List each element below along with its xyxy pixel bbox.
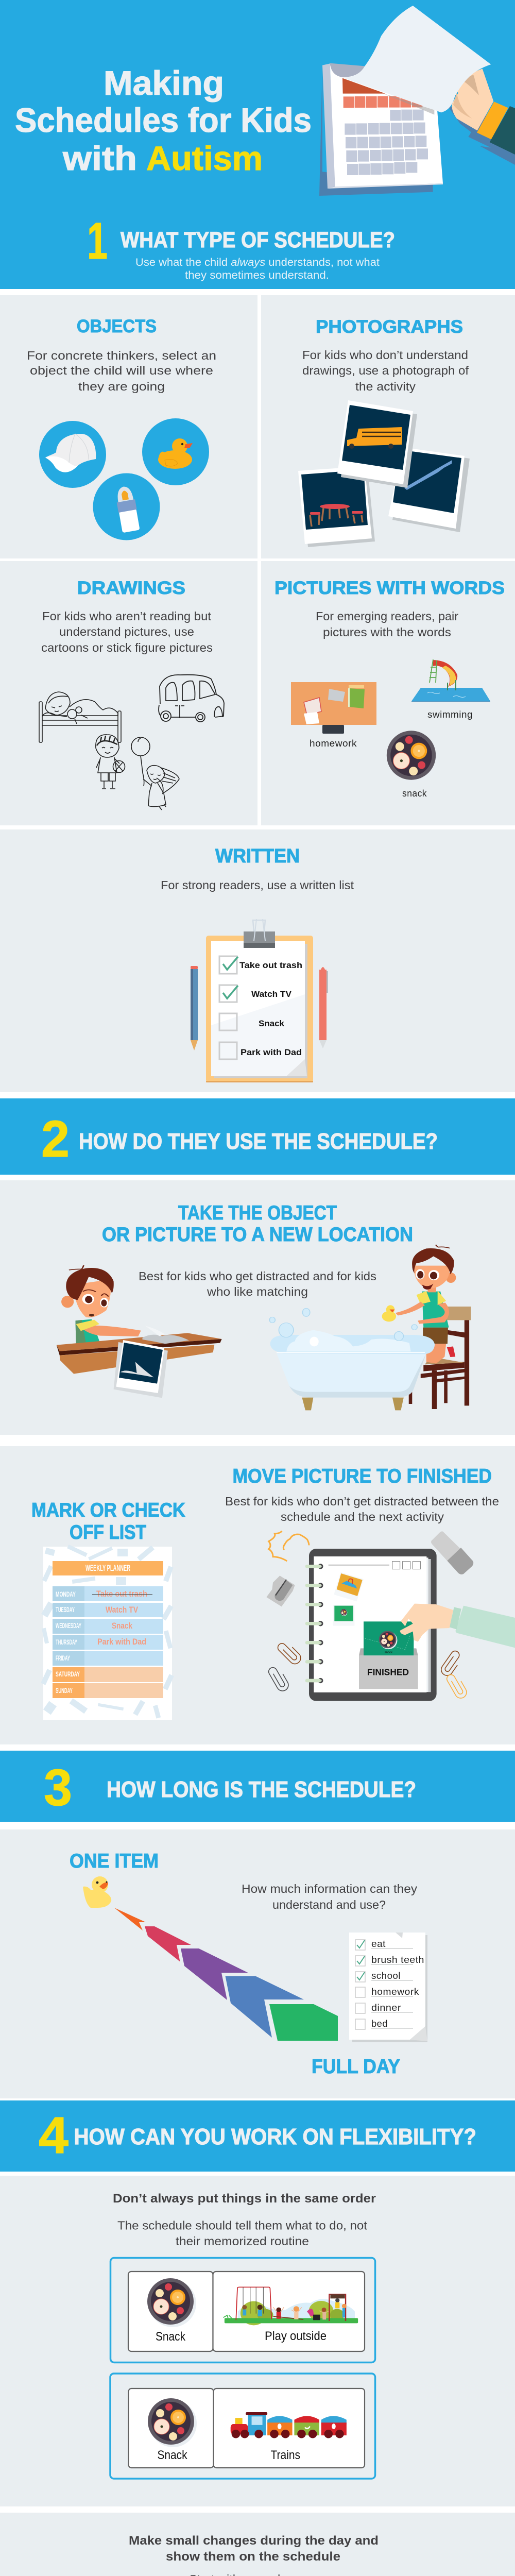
description: written: For strong readers, use a written list — [161, 878, 354, 892]
panel: small changes — [0, 2513, 515, 2576]
sharpener — [266, 1575, 295, 1606]
heading: objects: OBJECTS — [77, 316, 157, 336]
checkbox: take out trash: Take out trash — [239, 960, 302, 970]
panel: photographs — [261, 295, 515, 558]
description: pictures with words — [316, 609, 458, 639]
schedule example: snack then play outside — [110, 2258, 375, 2363]
panel: order of activities — [0, 2176, 515, 2506]
description: objects — [27, 349, 216, 393]
subheading: they sometimes understand. — [185, 269, 329, 281]
description: photographs: For kids who don’t understand — [302, 348, 468, 362]
heading: take the object — [102, 1202, 413, 1246]
card: play outside: Play outside — [265, 2329, 327, 2343]
full day checklist note — [349, 1933, 427, 2042]
description: drawings — [41, 609, 213, 654]
list item: eat: eat — [371, 1939, 386, 1949]
label: swimming: swimming — [427, 709, 473, 720]
planner row: friday — [53, 1651, 163, 1666]
heading: small changes: Make small changes during the day and — [129, 2534, 379, 2548]
description: move picture — [225, 1495, 499, 1523]
label: one item: ONE ITEM — [70, 1850, 159, 1872]
heading: small changes — [129, 2534, 379, 2564]
panel: objects — [0, 295, 258, 558]
label: full day: FULL DAY — [312, 2056, 400, 2078]
planner row: wednesday: WEDNESDAY — [56, 1621, 81, 1630]
illustration: boy at desk — [57, 1265, 222, 1398]
panel: mark off and move picture — [0, 1446, 515, 1744]
panel: drawings — [0, 561, 258, 825]
title: with — [62, 139, 137, 177]
description: objects: object the child will use where — [30, 364, 213, 377]
description: objects: they are going — [78, 380, 165, 393]
eraser — [431, 1531, 473, 1574]
finished pocket — [359, 1648, 418, 1689]
subheading: Use what the child always understands, not what — [135, 257, 380, 268]
hand placing card — [400, 1604, 515, 1648]
planner row: tuesday — [53, 1603, 163, 1617]
illustration: toy train — [231, 2412, 347, 2438]
description: pictures with words: For emerging readers, pair — [316, 609, 458, 623]
heading: photographs: PHOTOGRAPHS — [316, 317, 463, 337]
planner row: wednesday — [53, 1619, 163, 1634]
section header 3 — [0, 1751, 515, 1822]
boy standing at bathtub — [395, 1245, 456, 1364]
planner row: sunday: SUNDAY — [56, 1686, 73, 1694]
pencil shavings — [269, 1531, 309, 1561]
icon: yellow duck — [83, 1876, 111, 1908]
checkbox: watch TV — [219, 985, 292, 1002]
soap bubbles — [269, 1308, 417, 1341]
checkbox: snack: Snack — [259, 1019, 285, 1028]
label: snack: snack — [402, 788, 427, 799]
planner row: saturday — [53, 1667, 163, 1682]
list item: eat — [355, 1939, 413, 1950]
card: trains: Trains — [271, 2448, 300, 2462]
drawing: bus car — [159, 675, 224, 722]
drawing: child sleeping in bed — [39, 692, 121, 742]
clipboard checklist — [206, 919, 313, 1082]
description: pictures with words: pictures with the words — [323, 625, 451, 639]
icon: pen — [319, 967, 328, 1048]
heading: mark or check off list — [31, 1499, 185, 1544]
notebook rings — [307, 1565, 322, 1683]
description: drawings: For kids who aren’t reading but — [42, 609, 212, 623]
heading: how do they use: HOW DO THEY USE THE SCHEDULE? — [79, 1129, 438, 1154]
panel: written — [0, 829, 515, 1092]
description: how much information: understand and use? — [272, 1898, 386, 1911]
planner title — [53, 1561, 163, 1575]
number 1: 1 — [87, 212, 108, 270]
illustration: notebook with finished pocket — [266, 1531, 515, 1701]
icon: baby bottle — [93, 473, 160, 540]
title — [15, 64, 312, 177]
planner row: thursday: THURSDAY — [56, 1638, 77, 1646]
card: snack — [128, 2272, 213, 2351]
checkbox: snack — [219, 1013, 285, 1030]
list item: bed: bed — [371, 2019, 388, 2029]
icon: pencil — [191, 966, 198, 1050]
list item: homework: homework — [371, 1987, 420, 1997]
card: swimming done — [334, 1572, 364, 1601]
planner row: thursday — [53, 1635, 163, 1650]
list item: bed — [355, 2019, 413, 2029]
green snack card: snack — [385, 1651, 392, 1654]
icon: calendar with hand turning page — [319, 6, 515, 196]
paperclips — [267, 1639, 469, 1700]
description: take the object: Best for kids who get distracted and for kids — [139, 1269, 376, 1283]
planner row: sunday — [53, 1683, 163, 1698]
panel: pictures with words — [261, 561, 515, 825]
heading: small changes: show them on the schedule — [166, 2550, 340, 2564]
description: memorized routine: their memorized routine — [176, 2234, 309, 2248]
number 2: 2 — [41, 1110, 70, 1168]
planner row: tuesday: TUESDAY — [56, 1605, 75, 1614]
card: trains — [213, 2388, 365, 2468]
illustration: playground — [223, 2287, 358, 2325]
subheading — [135, 257, 380, 281]
description: memorized routine: The schedule should tell them what to do, not — [117, 2218, 368, 2232]
list item: brush teeth — [355, 1955, 424, 1966]
description: take the object — [139, 1269, 376, 1298]
planner title: WEEKLY PLANNER — [85, 1563, 130, 1573]
checkbox: park with dad: Park with Dad — [241, 1047, 302, 1057]
description: photographs: drawings, use a photograph of — [302, 364, 469, 377]
title: Making — [104, 64, 224, 102]
picture: snack bowl — [387, 731, 439, 783]
description: objects: For concrete thinkers, select an — [27, 349, 216, 362]
heading: move picture to finished: MOVE PICTURE TO FINISHED — [233, 1465, 492, 1487]
number 4: 4 — [39, 2107, 68, 2164]
weekly planner — [41, 1545, 174, 1720]
title: Schedules for Kids — [15, 101, 312, 139]
number 3: 3 — [44, 1759, 72, 1817]
planner row: tuesday: Watch TV — [106, 1605, 139, 1615]
chair — [409, 1307, 471, 1409]
photo: toothbrush — [388, 447, 470, 532]
heading: mark or check off list: MARK OR CHECK — [31, 1499, 185, 1521]
planner row: monday: MONDAY — [56, 1590, 76, 1598]
card: snack — [129, 2388, 213, 2468]
planner row: thursday: Park with Dad — [97, 1637, 146, 1647]
description: move picture: schedule and the next activity — [281, 1510, 444, 1523]
finished pocket: FINISHED — [367, 1667, 409, 1677]
green snack card — [364, 1621, 414, 1655]
panel: hero header — [0, 0, 515, 289]
planner row: monday — [53, 1586, 163, 1601]
photo: school bus — [337, 400, 417, 488]
panel: take object to new location — [0, 1180, 515, 1435]
planner row: friday: FRIDAY — [56, 1654, 70, 1662]
heading: take the object: TAKE THE OBJECT — [178, 1202, 337, 1224]
card: play outside — [213, 2272, 365, 2351]
list item: dinner: dinner — [371, 2003, 401, 2013]
schedule example: snack then trains — [110, 2374, 375, 2479]
description: memorized routine — [117, 2218, 368, 2248]
drawing: girl with balloon — [131, 737, 179, 810]
illustration: bathtub with bubbles — [269, 1245, 471, 1410]
description: drawings: cartoons or stick figure pictures — [41, 641, 213, 654]
description: photographs — [302, 348, 469, 393]
heading: drawings: DRAWINGS — [77, 578, 185, 598]
list item: homework — [355, 1987, 420, 1997]
description: photographs: the activity — [355, 380, 416, 393]
arrow: growing schedule length — [114, 1908, 338, 2041]
heading: how long: HOW LONG IS THE SCHEDULE? — [107, 1777, 416, 1802]
checkbox: park with dad — [219, 1042, 302, 1059]
card: snack: Snack — [156, 2330, 186, 2344]
list item: dinner — [355, 2003, 413, 2013]
picture: swimming pool — [411, 659, 490, 702]
description: drawings: understand pictures, use — [59, 625, 194, 638]
heading: what type of schedule: WHAT TYPE OF SCHEDULE? — [121, 228, 395, 252]
checkbox: take out trash — [219, 956, 302, 974]
checkbox: watch TV: Watch TV — [251, 989, 292, 999]
section header 2 — [0, 1098, 515, 1175]
description: take the object: who like matching — [207, 1285, 308, 1298]
list item: school — [355, 1971, 413, 1982]
heading: mark or check off list: OFF LIST — [70, 1521, 146, 1544]
card: snack: Snack — [158, 2448, 187, 2462]
photo: table and stools — [298, 466, 375, 547]
icon: rubber duck in hand — [382, 1305, 396, 1321]
heading: take the object: OR PICTURE TO A NEW LOCATION — [102, 1224, 413, 1246]
card: green done — [333, 1605, 354, 1626]
description: how much information — [242, 1882, 418, 1911]
picture: homework desk — [291, 682, 376, 734]
heading: written: WRITTEN — [215, 845, 300, 867]
heading: pictures with words: PICTURES WITH WORDS — [274, 578, 505, 598]
icon: rubber duck — [142, 418, 209, 485]
heading: flexibility: HOW CAN YOU WORK ON FLEXIBILITY? — [74, 2124, 476, 2149]
heading: same order: Don’t always put things in the same order — [113, 2192, 376, 2206]
binder clip — [244, 919, 275, 948]
description: move picture: Best for kids who don’t get distracted between the — [225, 1495, 499, 1508]
section header 4 — [0, 2100, 515, 2172]
drawing: boy with ball — [96, 735, 125, 789]
planner row: monday: Take out trash — [96, 1589, 147, 1599]
panel: how long is the schedule — [0, 1829, 515, 2098]
list item: school: school — [371, 1971, 401, 1981]
title: Autism — [146, 139, 263, 177]
planner row: saturday: SATURDAY — [56, 1670, 80, 1678]
list item: brush teeth: brush teeth — [371, 1955, 424, 1965]
icon: baseball cap — [39, 421, 106, 488]
label: homework: homework — [310, 738, 357, 749]
description: how much information: How much information can they — [242, 1882, 418, 1895]
planner row: wednesday: Snack — [112, 1621, 132, 1631]
